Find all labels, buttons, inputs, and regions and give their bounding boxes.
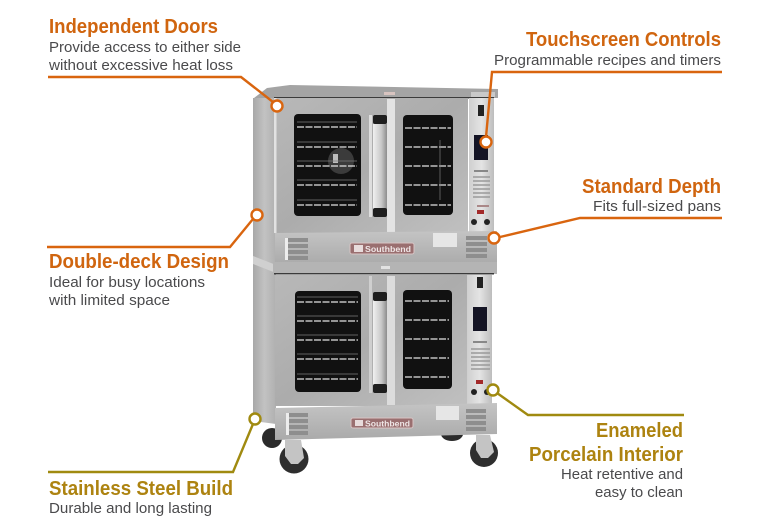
lower oven doors	[275, 275, 467, 406]
left window	[294, 114, 361, 216]
callout: Double-deck Design: with limited space	[48, 293, 170, 309]
logo	[350, 243, 414, 254]
upper oven doors	[274, 98, 468, 233]
upper oven top lid	[254, 85, 498, 98]
rear casters	[262, 428, 463, 448]
callout: Independent Doors: without excessive heat loss	[48, 58, 233, 74]
lower control panel	[467, 275, 492, 405]
data label	[436, 406, 459, 420]
upper control panel	[469, 98, 494, 233]
description: Programmable recipes and timers	[494, 53, 721, 69]
leader line	[497, 393, 684, 415]
left window	[295, 291, 361, 392]
right window	[403, 115, 453, 215]
callout: Enameled Porcelain Interior: Porcelain Interior	[529, 444, 683, 466]
description: Durable and long lasting	[49, 501, 212, 517]
leader line	[500, 218, 722, 237]
front left caster	[280, 440, 308, 474]
upper base panel	[275, 231, 497, 265]
callout: Stainless Steel Build	[48, 414, 260, 517]
leader line	[486, 72, 722, 137]
oven side panel	[253, 98, 276, 424]
door handle	[369, 276, 387, 393]
leader line	[48, 424, 253, 472]
right window	[403, 290, 452, 389]
oven: double-deck stainless steel unit	[253, 85, 498, 474]
leader line	[47, 219, 253, 247]
logo: Southbend	[365, 420, 410, 428]
logo	[351, 418, 413, 428]
heading: Stainless Steel Build	[49, 478, 233, 500]
callout: Enameled Porcelain Interior: easy to clean	[595, 485, 683, 501]
logo: Southbend	[365, 245, 411, 254]
callout: Independent Doors	[48, 16, 283, 112]
callout: Touchscreen Controls	[480, 29, 722, 148]
description: Heat retentive and	[561, 467, 683, 483]
lower oven top lid	[273, 262, 497, 274]
heading: Standard Depth	[582, 176, 721, 198]
right vents	[466, 236, 487, 258]
heading: Double-deck Design	[49, 251, 229, 273]
data label	[433, 233, 457, 247]
heading: Touchscreen Controls	[526, 29, 721, 51]
callout: Standard Depth	[488, 176, 722, 244]
right vents	[466, 409, 486, 431]
left vents	[286, 413, 308, 435]
lower base panel	[275, 403, 497, 440]
description: Ideal for busy locations	[49, 275, 205, 291]
callout: Double-deck Design	[47, 210, 262, 309]
door handle	[369, 115, 387, 217]
front right caster	[470, 435, 498, 467]
description: Provide access to either side	[49, 40, 241, 56]
heading: Enameled	[596, 420, 683, 442]
callout: Enameled Porcelain Interior	[488, 384, 684, 501]
leader line	[48, 77, 273, 102]
heading: Independent Doors	[49, 16, 218, 38]
description: Fits full-sized pans	[593, 199, 721, 215]
left vents	[285, 238, 308, 260]
